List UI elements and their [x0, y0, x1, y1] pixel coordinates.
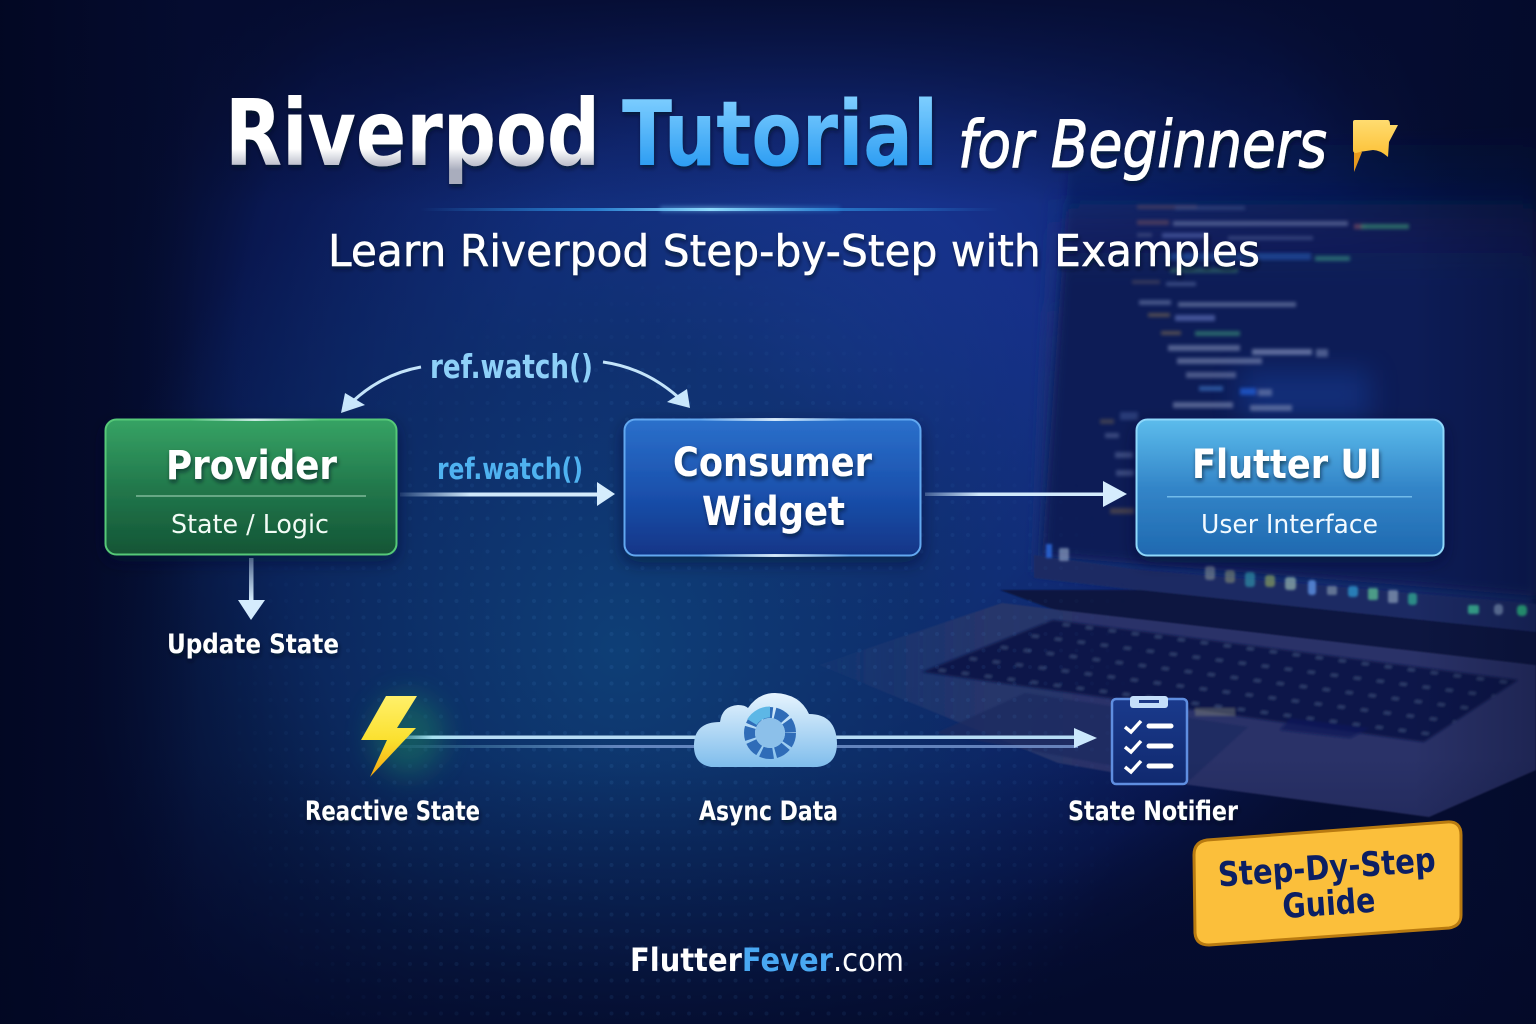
arrow: provider to update state [238, 558, 265, 620]
arrow: ref.watch to provider [341, 367, 421, 413]
flutter ui subtitle: User Interface [1201, 510, 1378, 540]
laptop base [819, 603, 1536, 817]
arrow: ref.watch to consumer [603, 362, 690, 408]
arrow: state flow line [398, 728, 1097, 748]
consumer widget heading: Consumer [673, 440, 872, 486]
provider subtitle: State / Logic [171, 510, 329, 540]
state notifier label: State Notifier [1068, 796, 1239, 827]
title: Tutorial [622, 82, 938, 187]
reactive state label: Reactive State [305, 796, 480, 827]
taskbar icons [1046, 544, 1527, 616]
icon: clipboard checklist [1112, 696, 1187, 784]
consumer widget heading: Widget [702, 489, 845, 535]
badge text: Guide [1281, 881, 1377, 927]
icon: cloud [694, 693, 837, 767]
badge text [1217, 840, 1439, 931]
arrow: consumer to flutter ui [925, 481, 1127, 507]
title divider [420, 206, 1000, 212]
update state label: Update State [167, 629, 339, 660]
provider heading: Provider [166, 443, 337, 489]
icon: yellow flag [1353, 120, 1398, 172]
icon: lightning bolt [361, 696, 417, 777]
middle ref.watch label: ref.watch() [437, 452, 583, 486]
badge text: Step-Dy-Step [1217, 840, 1437, 896]
flutter ui heading: Flutter UI [1192, 442, 1382, 488]
title: for Beginners [958, 108, 1327, 183]
top ref.watch label: ref.watch() [430, 347, 593, 386]
keyboard [922, 620, 1518, 742]
panel: consumer widget [624, 418, 920, 557]
panel: flutter ui [1136, 420, 1444, 556]
laptop photo backdrop [819, 130, 1536, 817]
trackpad [936, 693, 1248, 780]
arrow: provider to consumer [400, 482, 615, 506]
title [225, 80, 1327, 187]
panel: provider [106, 418, 396, 554]
laptop screen [1034, 130, 1536, 628]
subtitle: Learn Riverpod Step-by-Step with Examples [328, 226, 1260, 277]
blurred code lines [1100, 205, 1409, 514]
title: Riverpod [225, 80, 600, 187]
laptop hinge strip [1000, 555, 1536, 665]
footer: flutterfever.com: FlutterFever.com [630, 941, 904, 979]
badge: step-by-step guide [1194, 822, 1461, 945]
async data label: Async Data [699, 796, 838, 827]
green glow behind bolt [372, 695, 444, 775]
